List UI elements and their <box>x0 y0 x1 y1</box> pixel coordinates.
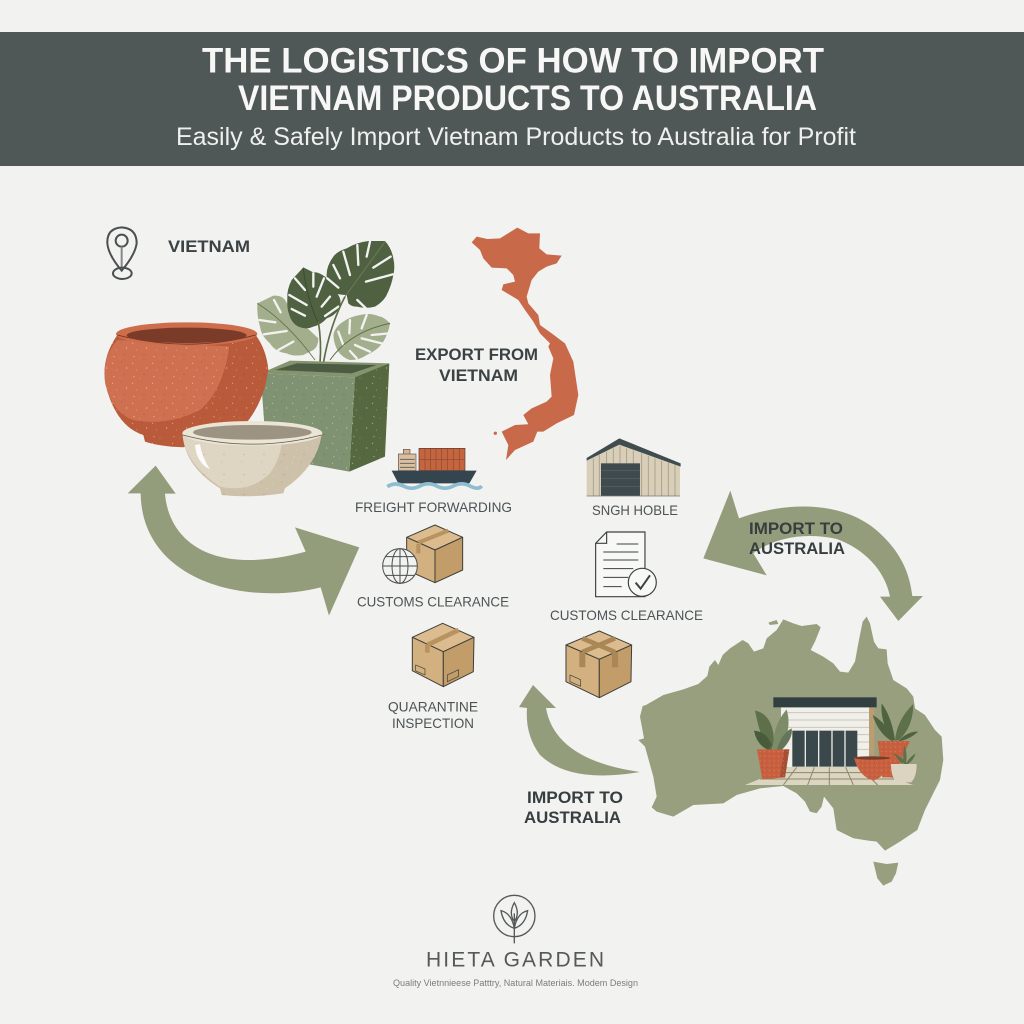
arrow: Australia to box <box>519 685 640 776</box>
icon: location pin <box>107 227 137 279</box>
terracotta bowl <box>104 322 268 447</box>
brand name: HIETA GARDEN <box>426 948 604 972</box>
label: quarantine inspection <box>388 698 478 731</box>
subtitle: Easily & Safely Import Vietnam Products to Australia for Profit <box>176 123 856 151</box>
green planter <box>261 361 389 472</box>
label: import to Australia lower: IMPORT TO <box>527 788 623 807</box>
title: THE LOGISTICS OF HOW TO IMPORT <box>202 42 824 80</box>
label: import to Australia lower <box>524 788 623 827</box>
icon: cargo ship <box>387 448 482 488</box>
left potted plant <box>754 709 792 779</box>
icon: box with globe <box>383 525 463 583</box>
label: export from Vietnam <box>415 345 538 385</box>
cream speckled bowl <box>182 421 322 496</box>
title: VIETNAM PRODUCTS TO AUSTRALIA <box>238 79 817 118</box>
icon: cardboard box <box>412 623 474 687</box>
map: Vietnam <box>472 228 578 460</box>
icon: taped box <box>566 631 632 698</box>
map: Australia <box>638 617 943 886</box>
label: quarantine inspection: INSPECTION <box>392 715 474 731</box>
label: import to Australia upper <box>749 519 845 558</box>
title <box>202 42 824 118</box>
label: export from Vietnam: VIETNAM <box>439 366 518 385</box>
icon: warehouse <box>587 438 681 496</box>
label: quarantine inspection: QUARANTINE <box>388 698 478 714</box>
label: import to Australia upper: IMPORT TO <box>749 519 843 538</box>
arrow: curved arrow from pots to logistics <box>128 466 359 616</box>
label: customs clearance left: CUSTOMS CLEARANCE <box>357 594 509 610</box>
right potted plants <box>854 703 918 782</box>
header banner <box>0 32 1024 166</box>
shop building <box>745 697 913 785</box>
logo mark <box>494 895 535 943</box>
label: import to Australia upper: AUSTRALIA <box>749 539 845 558</box>
arrow: curved arrow toward Australia <box>703 491 923 621</box>
illustration: Vietnamese pots and plant <box>104 241 394 496</box>
label: SNGH HOBLE: SNGH HOBLE <box>592 502 678 518</box>
label: import to Australia lower: AUSTRALIA <box>524 808 621 827</box>
tagline: Quality Vietnnieese Patttry, Natural Materiais. Modem Design <box>393 978 638 988</box>
illustration: shop with pots <box>745 697 918 785</box>
icon: document with check <box>596 532 656 597</box>
monstera plant <box>257 241 394 363</box>
label: customs clearance right: CUSTOMS CLEARANCE <box>550 607 703 623</box>
logo: Hieta Garden <box>393 895 638 988</box>
label: export from Vietnam: EXPORT FROM <box>415 345 538 364</box>
label: freight forwarding: FREIGHT FORWARDING <box>355 499 512 515</box>
label: Vietnam: VIETNAM <box>168 238 250 256</box>
